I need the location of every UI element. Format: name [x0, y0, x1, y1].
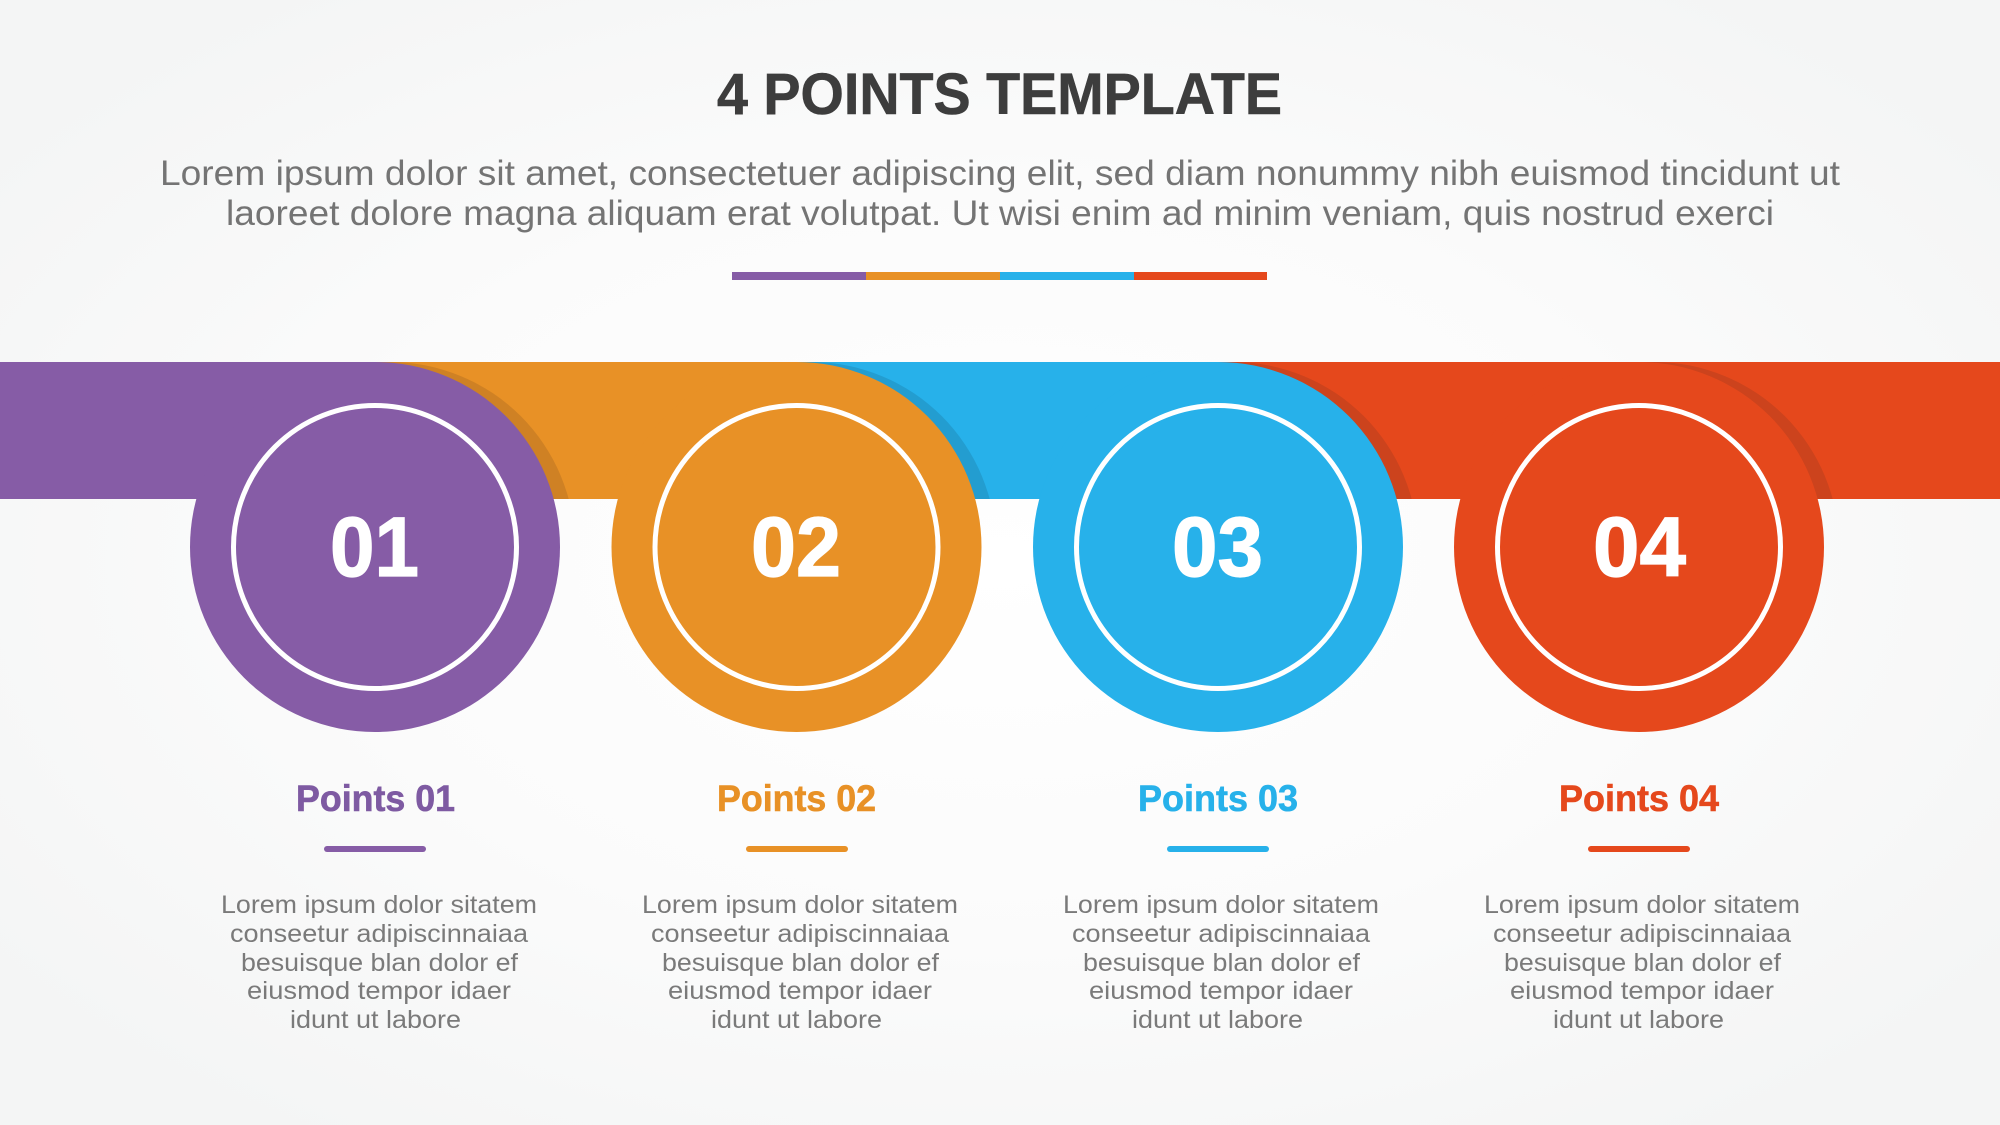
subtitle text block: laoreet dolore magna aliquam erat volutpat. Ut wisi enim ad minim veniam, quis nostrud exerci — [226, 194, 1774, 233]
four-colour divider bar — [732, 272, 1267, 280]
body text: point 04: idunt ut labore — [1553, 1006, 1724, 1034]
body text: point 02: idunt ut labore — [711, 1006, 882, 1034]
point 03 circle on blue band — [796, 362, 1418, 732]
text panel: point 04 — [1484, 778, 1800, 1034]
body text: point 01: conseetur adipiscinnaiaa — [230, 920, 528, 948]
heading: points 04: Points 04 — [1559, 778, 1719, 819]
point 02 circle on orange band: 02 — [751, 500, 841, 594]
point 02 circle on orange band — [375, 362, 996, 732]
body text: point 03: Lorem ipsum dolor sitatem — [1063, 891, 1379, 919]
body text: point 01: Lorem ipsum dolor sitatem — [221, 891, 537, 919]
heading: points 01: Points 01 — [296, 778, 455, 819]
body text: point 04: besuisque blan dolor ef — [1504, 949, 1781, 977]
point 01 circle on purple band — [0, 362, 575, 732]
title: 4 POINTS TEMPLATE — [717, 62, 1282, 127]
point 01 circle on purple band: 01 — [330, 500, 419, 594]
body text: point 01 — [221, 891, 537, 1034]
body text: point 04: Lorem ipsum dolor sitatem — [1484, 891, 1800, 919]
text panel: point 03 — [1063, 778, 1379, 1034]
point 04 circle on red band — [1218, 362, 2000, 732]
body text: point 04: conseetur adipiscinnaiaa — [1493, 920, 1791, 948]
body text: point 02: besuisque blan dolor ef — [662, 949, 939, 977]
body text: point 03: idunt ut labore — [1132, 1006, 1303, 1034]
body text: point 02: Lorem ipsum dolor sitatem — [642, 891, 958, 919]
body text: point 04: eiusmod tempor idaer — [1510, 977, 1774, 1005]
body text: point 03 — [1063, 891, 1379, 1034]
text panel: point 01 — [221, 778, 537, 1034]
subtitle text block — [160, 154, 1840, 233]
heading: points 02: Points 02 — [717, 778, 876, 819]
point 03 circle on blue band: 03 — [1172, 500, 1263, 594]
body text: point 03: conseetur adipiscinnaiaa — [1072, 920, 1370, 948]
point 04 circle on red band: 04 — [1593, 500, 1686, 594]
subtitle text block: Lorem ipsum dolor sit amet, consectetuer adipiscing elit, sed diam nonummy nibh euismod tincidunt ut — [160, 154, 1840, 193]
heading: points 03: Points 03 — [1138, 778, 1298, 819]
body text: point 03: besuisque blan dolor ef — [1083, 949, 1360, 977]
text panel: point 02 — [642, 778, 958, 1034]
body text: point 03: eiusmod tempor idaer — [1089, 977, 1353, 1005]
body text: point 01: idunt ut labore — [290, 1006, 461, 1034]
body text: point 01: besuisque blan dolor ef — [241, 949, 518, 977]
body text: point 02: conseetur adipiscinnaiaa — [651, 920, 949, 948]
body text: point 02: eiusmod tempor idaer — [668, 977, 932, 1005]
ribbon with four numbered circles — [0, 362, 2000, 732]
body text: point 04 — [1484, 891, 1800, 1034]
body text: point 01: eiusmod tempor idaer — [247, 977, 511, 1005]
body text: point 02 — [642, 891, 958, 1034]
